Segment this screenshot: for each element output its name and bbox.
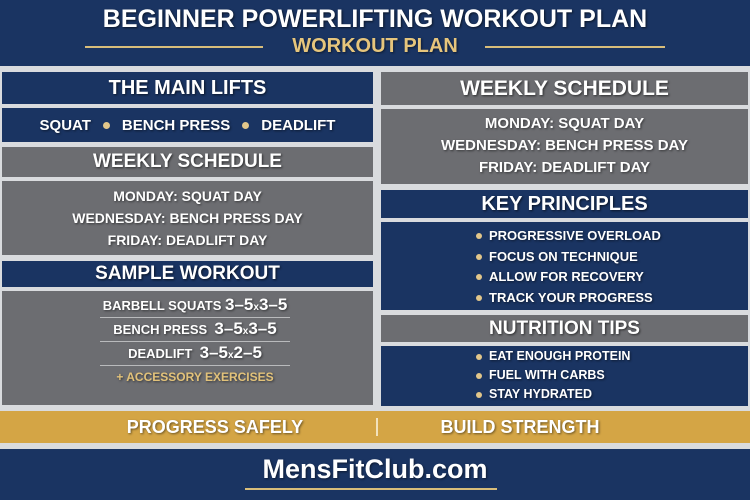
key principles list: PROGRESSIVE OVERLOAD <box>489 228 661 243</box>
footer url: MensFitClub.com <box>262 454 488 484</box>
key principles list <box>476 228 662 304</box>
panel: weekly schedule body left: MONDAY: SQUAT DAY <box>113 188 262 204</box>
panel: weekly schedule header right: WEEKLY SCHEDULE <box>460 76 669 100</box>
footer <box>0 449 750 500</box>
panel: nutrition header: NUTRITION TIPS <box>489 318 640 338</box>
panel: sample workout header <box>2 261 373 287</box>
panel: weekly schedule header right <box>381 72 748 105</box>
banner: gold <box>0 411 750 443</box>
nutrition list: FUEL WITH CARBS <box>489 368 605 382</box>
key principles list: FOCUS ON TECHNIQUE <box>489 248 638 264</box>
panel: weekly schedule body left: FRIDAY: DEADLIFT DAY <box>108 232 267 248</box>
panel: weekly schedule header left <box>2 147 373 177</box>
key principles list: TRACK YOUR PROGRESS <box>489 290 653 304</box>
panel: weekly schedule body right: MONDAY: SQUAT DAY <box>485 115 644 132</box>
panel: main lifts list <box>2 108 373 142</box>
banner: gold: PROGRESS SAFELY <box>127 417 303 437</box>
panel: weekly schedule body right: FRIDAY: DEADLIFT DAY <box>479 159 650 176</box>
title: BEGINNER POWERLIFTING WORKOUT PLAN <box>103 4 647 32</box>
panel: nutrition header <box>381 315 748 342</box>
row: bench <box>100 318 290 342</box>
nutrition list: STAY HYDRATED <box>489 387 592 401</box>
panel: main lifts header: THE MAIN LIFTS <box>109 76 266 98</box>
panel: sample workout header: SAMPLE WORKOUT <box>95 263 280 284</box>
accessory text: + ACCESSORY EXERCISES <box>116 370 274 384</box>
panel: weekly schedule body left: WEDNESDAY: BENCH PRESS DAY <box>72 210 303 226</box>
panel: key principles body <box>381 222 748 310</box>
row: deadlift <box>100 342 290 366</box>
panel: key principles header <box>381 190 748 218</box>
header <box>0 0 750 66</box>
panel: weekly schedule body right <box>381 109 748 184</box>
nutrition list: EAT ENOUGH PROTEIN <box>489 349 630 363</box>
nutrition list <box>476 349 632 401</box>
panel: key principles header: KEY PRINCIPLES <box>481 192 648 214</box>
panel: sample workout body <box>2 291 373 405</box>
row: bench: BENCH PRESS 3–5x3–5 <box>113 319 277 338</box>
panel: weekly schedule body left <box>2 181 373 255</box>
panel: main lifts header <box>2 72 373 104</box>
panel: main lifts list: SQUAT BENCH PRESS DEADLIFT <box>40 116 335 134</box>
panel: nutrition body <box>381 346 748 406</box>
panel: weekly schedule header left: WEEKLY SCHEDULE <box>93 151 282 172</box>
row: squats: BARBELL SQUATS 3–5x3–5 <box>103 295 287 314</box>
subtitle: WORKOUT PLAN <box>292 35 458 57</box>
banner: gold: BUILD STRENGTH <box>440 417 600 437</box>
row: deadlift: DEADLIFT 3–5x2–5 <box>128 343 262 362</box>
key principles list: ALLOW FOR RECOVERY <box>489 269 644 284</box>
panel: weekly schedule body right: WEDNESDAY: BENCH PRESS DAY <box>441 137 688 154</box>
